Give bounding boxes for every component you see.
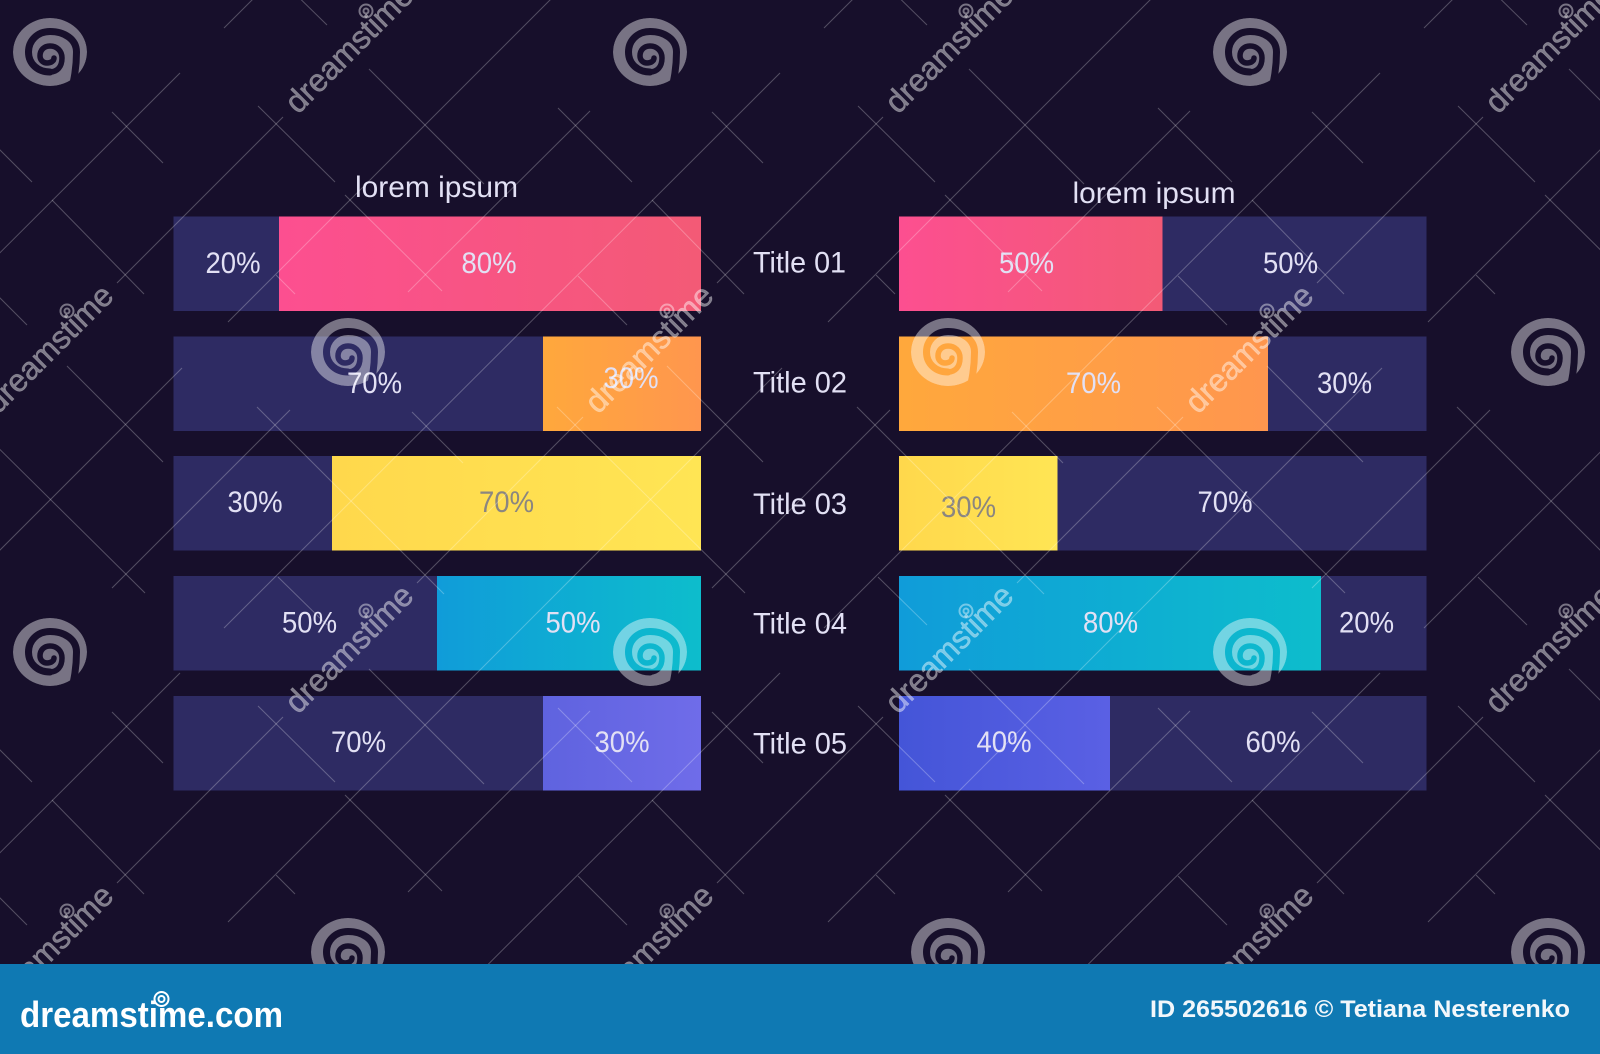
right row 2 xyxy=(899,336,1426,431)
heading: right: lorem ipsum xyxy=(1072,177,1236,210)
watermark: dreamstime wordmarks: dreamstime xyxy=(277,577,420,720)
panel: right comparison bars xyxy=(899,177,1426,790)
watermark: dreamstime wordmarks: dreamstime xyxy=(877,577,1020,720)
watermark: dreamstime wordmarks: dreamstime xyxy=(1177,877,1320,1020)
left row 1: 80% xyxy=(462,247,516,280)
panel: row titles xyxy=(753,246,847,760)
image credit: ID 265502616 © Tetiana Nesterenko xyxy=(1150,996,1570,1023)
panel: row titles: Title 04 xyxy=(753,608,847,640)
left row 3: 70% xyxy=(479,486,534,519)
left row 4 xyxy=(174,576,701,670)
left row 3: 30% xyxy=(228,486,282,519)
left row 5: 70% xyxy=(331,726,386,759)
left row 1 xyxy=(174,216,701,311)
right row 3: 30% xyxy=(941,491,996,524)
heading: left: lorem ipsum xyxy=(355,171,518,204)
right row 4 xyxy=(899,576,1426,670)
left row 5 xyxy=(174,696,701,790)
right row 2: 70% xyxy=(1066,367,1121,400)
left row 2 xyxy=(174,336,701,431)
panel: left comparison bars xyxy=(174,171,701,790)
logo text: dreamstime.com xyxy=(20,994,283,1035)
panel: row titles: Title 05 xyxy=(753,728,847,760)
right row 4: 80% xyxy=(1083,606,1138,640)
right row 1: 50% xyxy=(999,247,1054,280)
icon: logo spiral xyxy=(154,992,168,1006)
left row 3 xyxy=(174,456,701,550)
right row 5 xyxy=(899,696,1426,790)
footer banner xyxy=(0,964,1600,1054)
left row 1: 20% xyxy=(206,247,260,280)
watermark: dreamstime wordmarks: dreamstime xyxy=(577,877,720,1020)
right row 5: 40% xyxy=(976,726,1032,759)
left row 2: 30% xyxy=(604,362,658,395)
right row 5: 60% xyxy=(1246,726,1300,759)
watermark: dreamstime wordmarks: dreamstime xyxy=(1177,277,1320,420)
right row 1 xyxy=(899,216,1426,311)
left row 2: 70% xyxy=(347,367,402,400)
right row 1: 50% xyxy=(1263,247,1318,280)
right row 2: 30% xyxy=(1317,367,1372,400)
watermark: dreamstime wordmarks: dreamstime xyxy=(577,277,720,420)
left row 5: 30% xyxy=(594,726,650,759)
right row 3 xyxy=(899,456,1426,550)
panel: row titles: Title 02 xyxy=(753,366,847,400)
panel: row titles: Title 01 xyxy=(753,246,846,280)
right row 3: 70% xyxy=(1198,486,1252,519)
panel: row titles: Title 03 xyxy=(753,488,847,521)
left row 4: 50% xyxy=(282,606,337,640)
right row 4: 20% xyxy=(1339,606,1394,640)
left row 4: 50% xyxy=(546,606,600,640)
